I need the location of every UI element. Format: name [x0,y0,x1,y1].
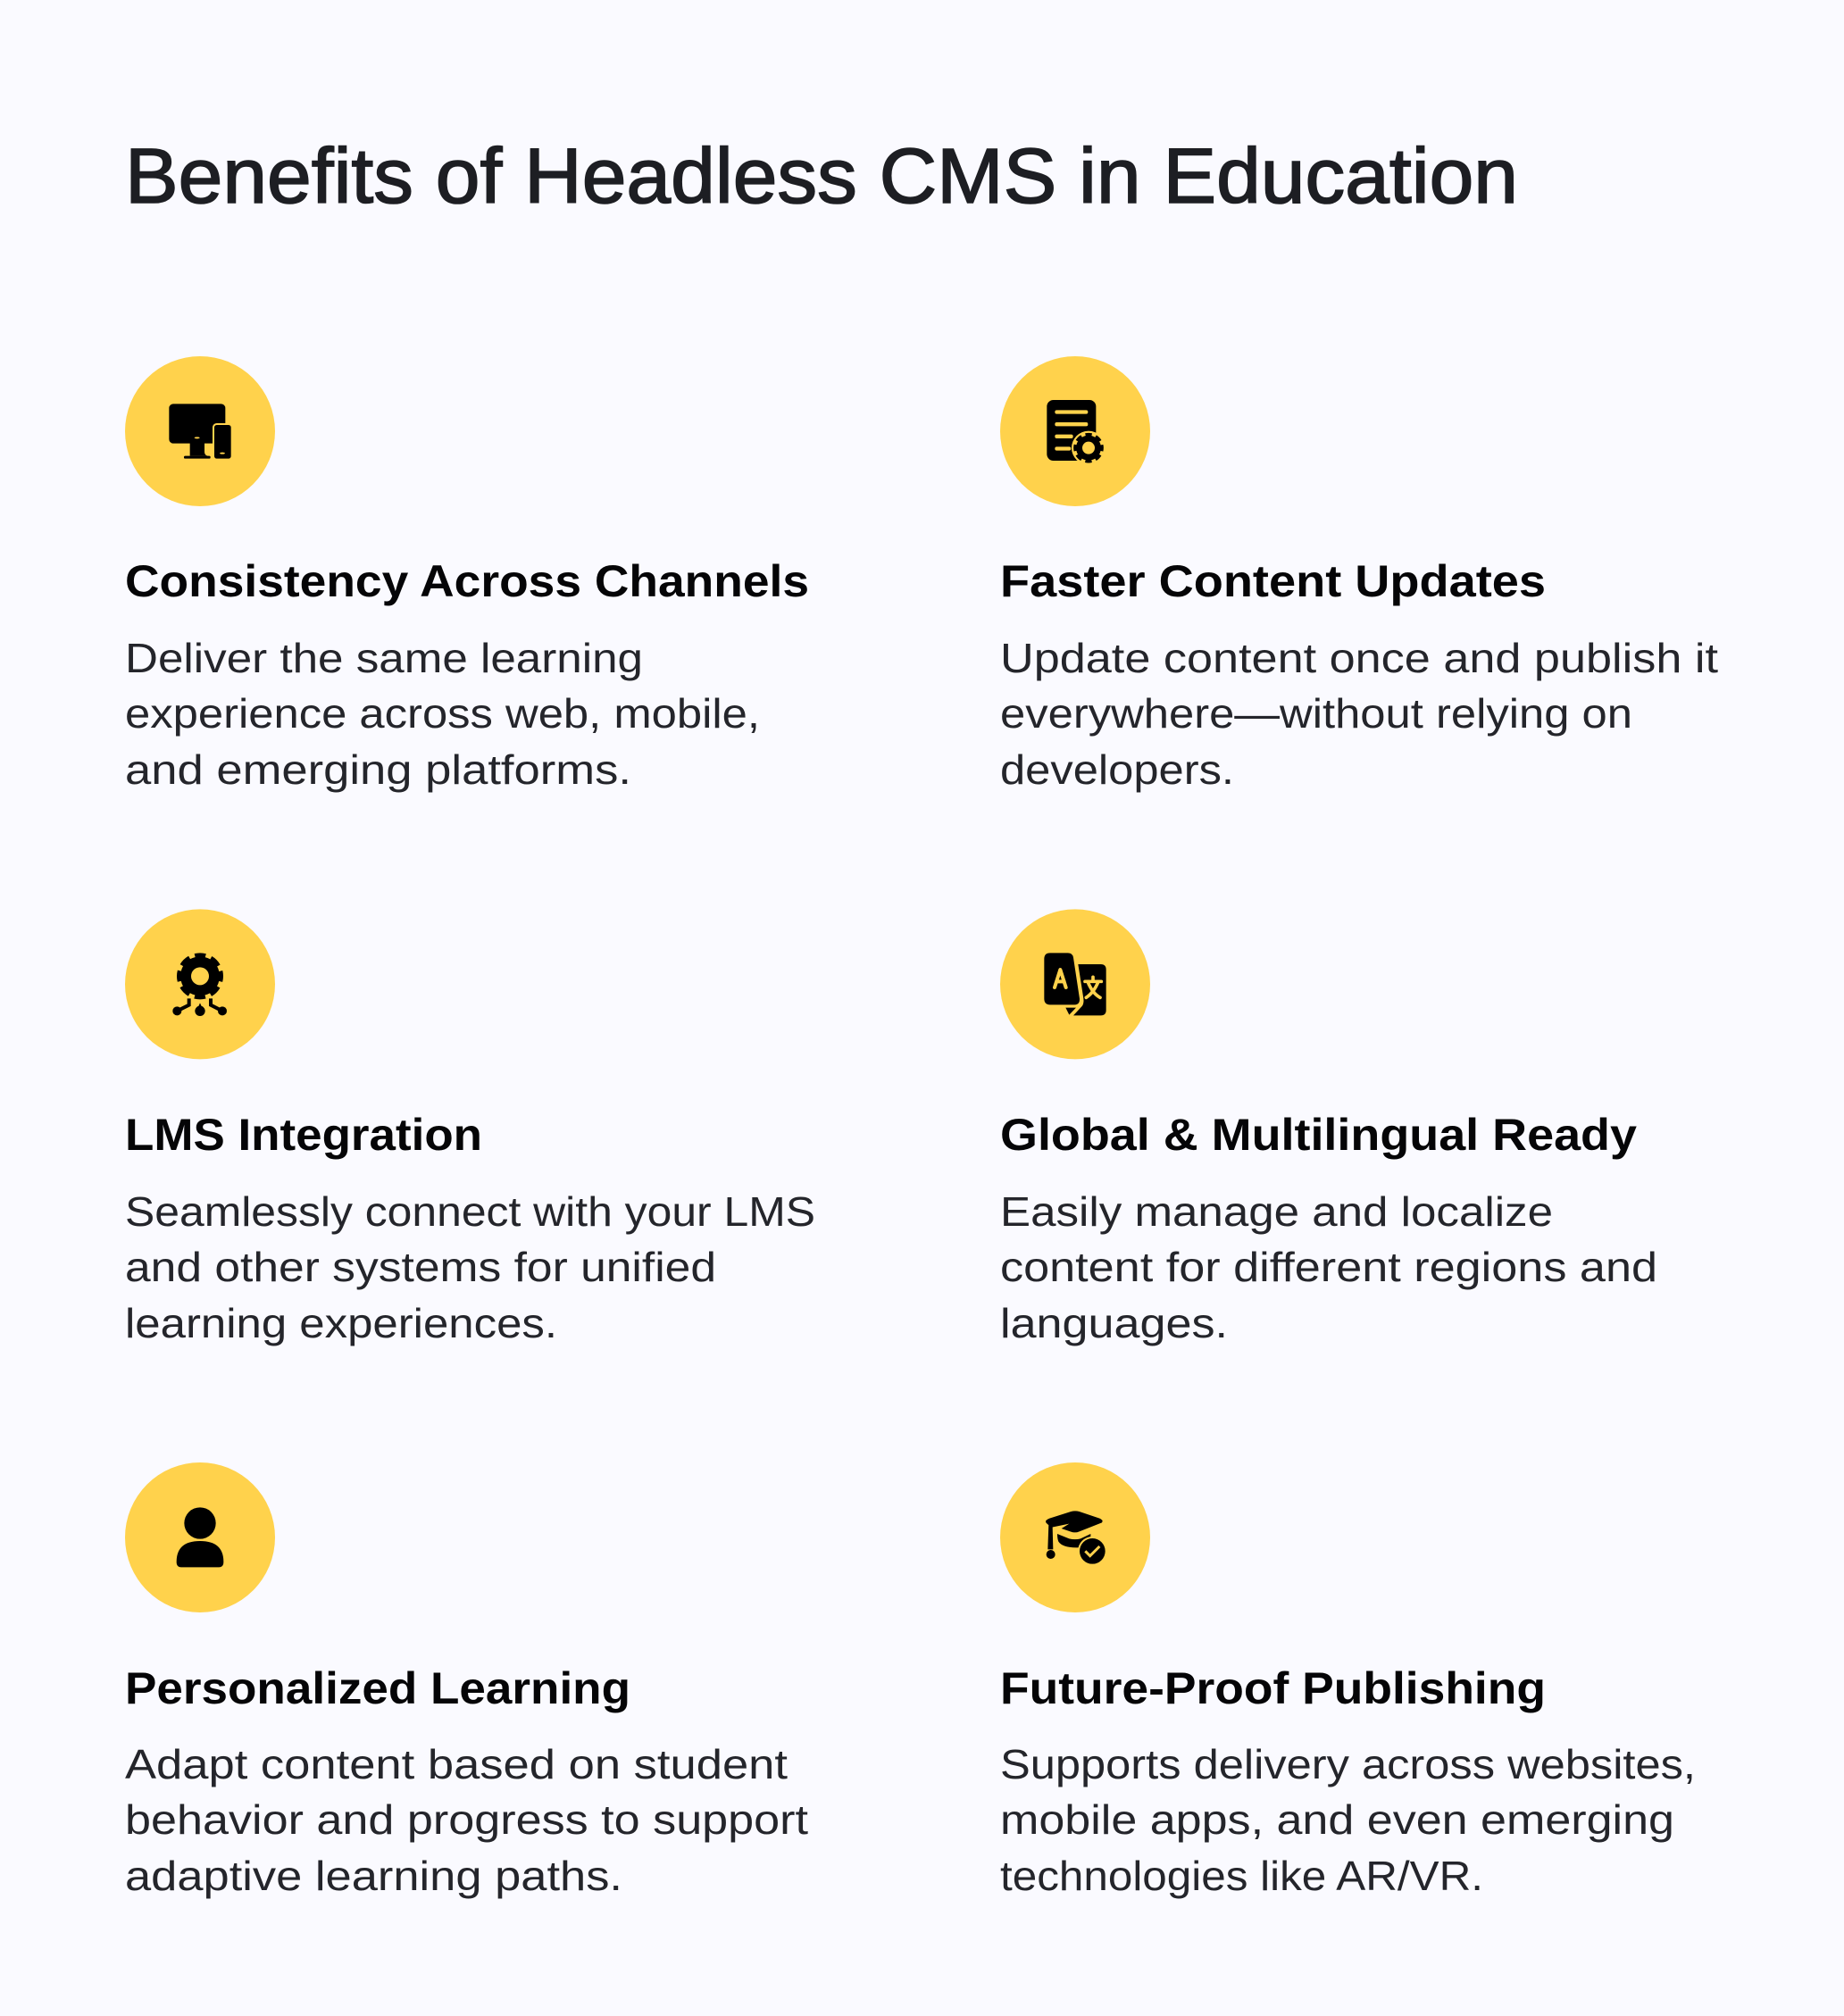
description: Seamlessly connect with your LMS [125,1188,815,1235]
heading: LMS Integration [125,1110,482,1160]
description: developers. [1000,746,1234,793]
heading: Consistency Across Channels [125,556,809,606]
heading: Faster Content Updates [1000,556,1546,606]
description: Easily manage and localize [1000,1188,1553,1235]
title: Benefits of Headless CMS in Education [125,133,1518,220]
description [1000,635,1718,793]
description: Deliver the same learning [125,635,643,681]
icon: translation cards [1000,909,1150,1059]
description: and other systems for unified [125,1244,716,1290]
description [125,1188,815,1346]
icon: person [125,1462,275,1612]
description [125,1741,808,1899]
panel: LMS integration [125,909,815,1346]
panel: faster content updates [1000,356,1718,793]
panel: consistency across channels [125,356,809,793]
description: mobile apps, and even emerging [1000,1796,1674,1843]
description: behavior and progress to support [125,1796,808,1843]
icon: graduation cap with check [1000,1462,1150,1612]
icon: monitor and phone [125,356,275,506]
icon: document with gear [1000,356,1150,506]
heading: Future-Proof Publishing [1000,1663,1546,1713]
description: Supports delivery across websites, [1000,1741,1696,1787]
description: languages. [1000,1300,1228,1346]
description: everywhere—without relying on [1000,690,1632,737]
icon: gear with network nodes [125,909,275,1059]
panel: future-proof publishing [1000,1462,1696,1899]
panel: personalized learning [125,1462,808,1899]
description [125,635,760,793]
description: experience across web, mobile, [125,690,760,737]
description: technologies like AR/VR. [1000,1853,1483,1899]
description [1000,1741,1696,1899]
heading: Global & Multilingual Ready [1000,1110,1637,1160]
description: adaptive learning paths. [125,1853,622,1899]
description: and emerging platforms. [125,746,631,793]
description: learning experiences. [125,1300,557,1346]
description: Adapt content based on student [125,1741,788,1787]
description [1000,1188,1657,1346]
description: content for different regions and [1000,1244,1657,1290]
heading: Personalized Learning [125,1663,630,1713]
description: Update content once and publish it [1000,635,1718,681]
panel: global and multilingual ready [1000,909,1657,1346]
